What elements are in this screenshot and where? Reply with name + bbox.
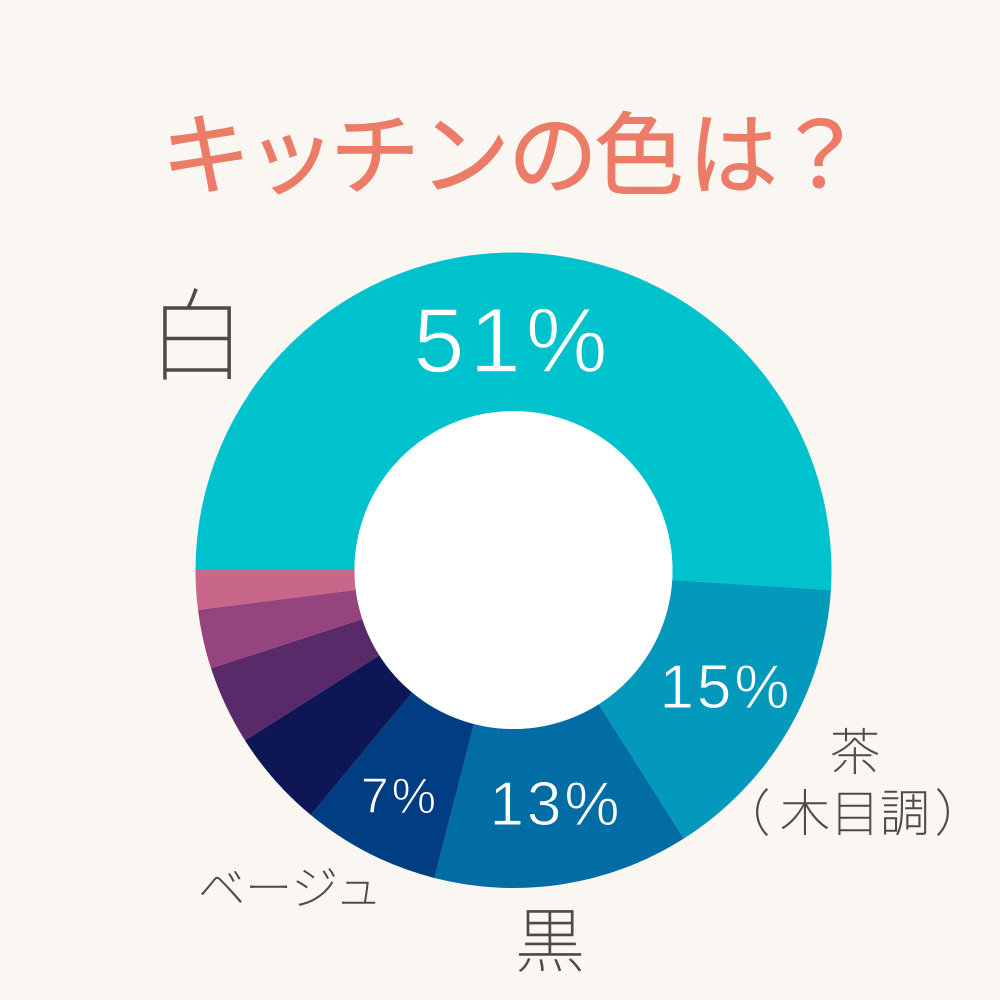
segment: brown 15% (599, 580, 831, 838)
segment: purple 5% (211, 619, 379, 740)
donut centre (354, 411, 672, 729)
label: wood grain: （木目調） (720, 774, 985, 846)
title: キッチンの色は？ (161, 83, 865, 213)
label: black: 黒 (515, 886, 585, 987)
value: 15%: 15% (659, 653, 793, 722)
segment: plum 4% (198, 590, 362, 668)
segment: rose 3% (195, 570, 356, 610)
segment: navy 5% (245, 655, 412, 815)
label: white: 白 (147, 256, 247, 401)
value: 13%: 13% (489, 770, 623, 839)
label: beige: ベージュ (198, 850, 382, 919)
donut chart (195, 252, 831, 888)
segment: black 13% (434, 704, 684, 888)
segment: white 51% (196, 252, 831, 590)
label: brown: 茶 (830, 713, 880, 785)
segment: beige 7% (311, 692, 474, 878)
value: 51%: 51% (413, 290, 613, 392)
value: 7%: 7% (361, 768, 439, 824)
